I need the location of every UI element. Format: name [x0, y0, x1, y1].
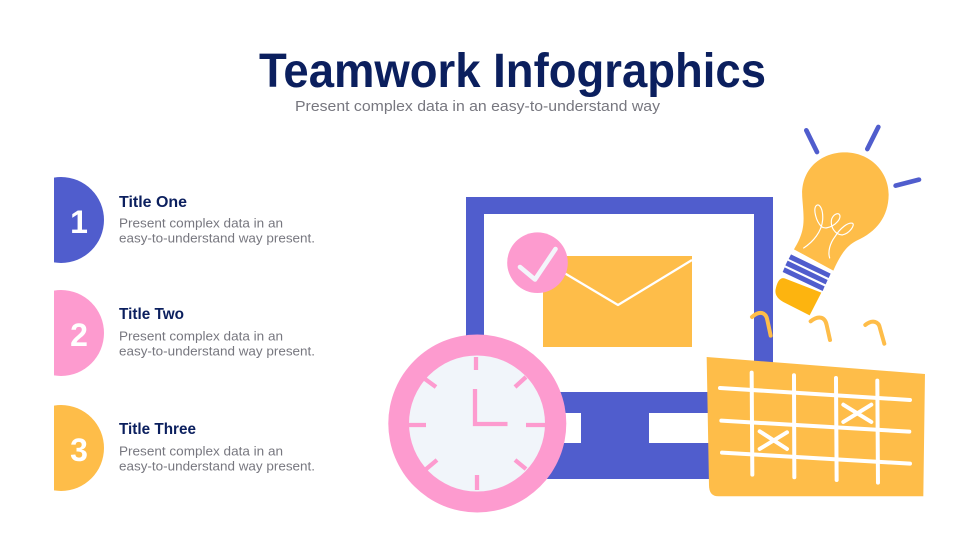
badge: number 1: 1: [70, 204, 88, 240]
icon: light bulb: [752, 127, 919, 344]
badge: number 2: [54, 290, 104, 376]
badge: number 1: [54, 177, 104, 263]
description: item three: Present complex data in an: [119, 444, 283, 458]
heading: Title Three: Title Three: [119, 421, 196, 438]
icon: check badge: [507, 232, 568, 293]
badge: number 3: [54, 405, 104, 491]
icon: calendar: [707, 357, 925, 496]
description: item two: Present complex data in an: [119, 330, 283, 344]
illustration: computer monitor: [466, 197, 773, 479]
description: item one: [119, 216, 315, 246]
badge: number 2: 2: [70, 317, 88, 353]
icon: clock: [388, 334, 566, 512]
description: item three: easy-to-understand way present.: [119, 460, 315, 474]
title: Teamwork Infographics: [259, 45, 766, 98]
description: item two: [119, 330, 315, 358]
description: item three: [119, 444, 315, 474]
icon: envelope: [543, 256, 692, 347]
heading: Title Two: Title Two: [119, 306, 184, 323]
icon: spark marks: [752, 313, 884, 344]
panel: item two: [54, 290, 314, 376]
panel: item one: [54, 177, 314, 263]
subtitle: Present complex data in an easy-to-understand way: [295, 98, 661, 115]
badge: number 3: 3: [70, 432, 88, 468]
description: item one: Present complex data in an: [119, 216, 283, 230]
panel: item three: [54, 405, 314, 491]
heading: Title One: Title One: [119, 194, 187, 211]
description: item two: easy-to-understand way present.: [119, 344, 315, 358]
description: item one: easy-to-understand way present.: [119, 232, 315, 246]
